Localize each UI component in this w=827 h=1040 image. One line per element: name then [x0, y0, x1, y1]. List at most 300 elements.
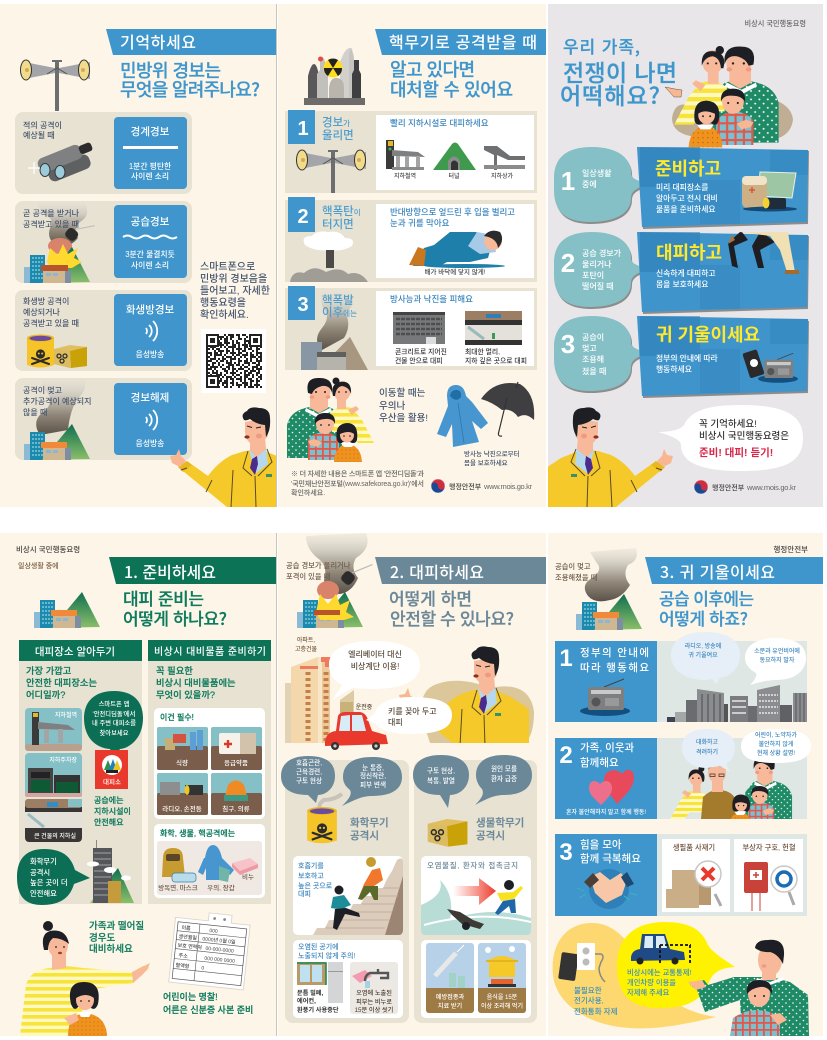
bubble: listen to radio: 귀 기울여요 [688, 651, 718, 659]
tile: vaccination [426, 943, 474, 1013]
callout: chemical attack go high: 화학무기 [30, 857, 57, 866]
callout: chemical attack go high: 높은 곳이 더 [30, 878, 68, 887]
icon: ID card: 0 [201, 965, 205, 972]
panel: 3 listen [548, 533, 823, 1036]
column: chemical attack: 화학무기 [350, 816, 389, 829]
title [390, 56, 513, 102]
section 3: after explosion: 건물 안으로 대피 [395, 356, 443, 365]
text: apartments: 아파트, [297, 636, 315, 644]
card: essentials [154, 708, 265, 819]
card: all clear: 않을 때 [23, 407, 47, 417]
tile: cooking: 이상 조리해 먹기 [481, 1002, 523, 1010]
column: chemical attack [281, 756, 409, 1023]
step 1: 준비하고 [655, 159, 721, 179]
bubble: ignore rumours: 소문과 유언비어에 [754, 647, 800, 655]
card: panic buying [662, 839, 730, 912]
callout: app: 내 주변 대피소를 [92, 718, 136, 727]
panel: nuclear attack [278, 4, 546, 507]
icon: radio [580, 679, 630, 716]
icon: red arrow [453, 878, 496, 905]
card: air raid alert: 곧 공격을 받거나 [23, 208, 80, 218]
text: family separation: 대비하세요 [89, 943, 133, 955]
bubble: symptoms 4: 환자 급증 [491, 774, 517, 783]
card: avoid contact [421, 856, 531, 935]
title: 안전할 수 있나요? [390, 605, 514, 630]
speech bubble: stairs [329, 641, 420, 700]
card: chemical alert: 화생방 공격이 [23, 296, 69, 306]
figure: running person [495, 880, 523, 915]
icon: handshake [577, 869, 637, 909]
icon: mushroom cloud [290, 232, 368, 282]
section 2: explosion: 반대방향으로 엎드린 후 입을 벌리고 [390, 207, 515, 217]
section 2: together: 2 [559, 742, 573, 769]
bubble: explain to vulnerable [741, 729, 811, 763]
icons: shelters [386, 140, 525, 170]
step 2: 신속하게 대피하고 [656, 268, 716, 278]
title: 대피 준비는 [123, 585, 204, 610]
card: all clear: 공격이 멎고 [23, 385, 62, 395]
column: know shelters: 안전해요 [94, 817, 123, 827]
illustration: family with grandfather [670, 760, 792, 819]
card: chemical alert [15, 290, 192, 371]
tile: cooking: 음식을 15분 [487, 993, 518, 1001]
section 3: overcome: 힘을 모아 [580, 838, 622, 851]
text: family separation: 가족과 떨어질 [89, 920, 144, 932]
text: raincoat caption: 몸을 보호하세요 [464, 458, 508, 467]
icon: hearts [589, 770, 634, 805]
callout: app [84, 691, 143, 757]
section 1: follow government: 정부의 안내에 [580, 647, 649, 659]
column: supplies [148, 640, 271, 904]
card: panic buying: 생필품 사재기 [673, 843, 715, 852]
text: situation [555, 562, 598, 582]
bubble: symptoms 3: 복통, 발열 [427, 776, 455, 785]
header ribbon [375, 557, 546, 584]
section 2: together [555, 729, 811, 828]
text: use raincoat or umbrella: 우산을 활용! [379, 412, 428, 424]
card: air raid alert: 공습경보 [131, 216, 170, 228]
illustration: person lying prone [409, 231, 505, 268]
callout: app: '안전디딤돌'에서 [93, 709, 136, 718]
card: stairs: 보호하고 [298, 871, 324, 880]
card: warning alert: 사이렌 소리 [131, 171, 169, 181]
card: blood donation [734, 839, 803, 912]
bubble: symptoms 2 [342, 757, 402, 806]
column: know shelters: 지하시설이 [94, 806, 131, 816]
section 3: after explosion [285, 286, 537, 370]
column: know shelters: 대피장소 알아두기 [35, 645, 115, 658]
column: know shelters: 공습에는 [94, 796, 123, 805]
step 2: 몸을 보호하세요 [656, 279, 708, 289]
card: warning alert: 1분간 평탄한 [129, 161, 171, 171]
section 2: explosion: 터지면 [322, 218, 354, 231]
section 1: follow government [555, 632, 807, 722]
title: 알고 있다면 [390, 56, 475, 82]
section 2: explosion: 핵폭탄이 [322, 204, 361, 218]
bubble: symptoms 4 [475, 755, 532, 805]
text: apartments [295, 636, 318, 653]
card: avoid contaminated air [293, 940, 403, 1018]
title: 무엇을 알려주나요? [120, 76, 260, 102]
header ribbon: 3. 귀 기울이세요 [660, 559, 775, 583]
section 2: together: 혼자 불안해하지 말고 함께 행동! [566, 808, 646, 816]
illustration: skyscraper [87, 840, 134, 903]
step 3: 멎고 [582, 343, 597, 353]
section 1: alarm: 경보가 [322, 116, 350, 129]
speech bubble: stairs: 비상계단 이용! [351, 661, 399, 671]
section 3: after explosion: 방사능과 낙진을 피해요 [390, 294, 473, 304]
column: supplies: 꼭 필요한 [156, 665, 193, 676]
icon: blue car [631, 934, 691, 964]
column: supplies: 비상시 대비물품 준비하기 [154, 645, 266, 658]
step 3: 공습이 [582, 332, 604, 342]
icon: shelter sign [95, 750, 128, 789]
section 3: overcome [555, 834, 807, 916]
character: mother and child [20, 921, 150, 1036]
icon: ID card: 주소 [178, 953, 188, 960]
step 3: 귀 기울이세요 [656, 325, 760, 345]
panel: remember sirens [0, 4, 300, 507]
card: stairs: 높은 곳으로 [298, 881, 333, 890]
header ribbon: 2. 대피하세요 [390, 559, 484, 583]
callout: traffic control: 개인차량 이용을 [627, 978, 676, 987]
text: apartments: 고층건물 [295, 645, 318, 653]
bubble: encourage [682, 729, 735, 772]
text: family separation [89, 920, 144, 955]
card: CBRN protection: 비누 [242, 872, 254, 881]
section 1: follow government: 1 [559, 645, 573, 672]
card: warning alert: 경계경보 [131, 125, 170, 138]
section 3: overcome: 함께 극복해요 [580, 852, 641, 865]
footnote: '국민재난안전포털(www.safekorea.go.kr)'에서 [291, 479, 424, 488]
figure: climbing person [358, 857, 383, 900]
panel: 1 prepare [0, 533, 277, 1036]
card: warning alert: 적의 공격이 [23, 120, 62, 130]
column: supplies: 무엇이 있을까? [156, 689, 215, 700]
text: driving label: 운전중 [356, 703, 373, 711]
callout: traffic control: 자제해 주세요 [627, 988, 670, 997]
step 3: 행동하세요 [656, 364, 692, 374]
speech bubble: leave keys: 대피 [388, 717, 403, 727]
speech bubble: remember [658, 405, 803, 471]
section 2: explosion: 2 [297, 206, 309, 228]
bubble: explain to vulnerable: 불안하지 않게 [759, 740, 793, 748]
section 3: after explosion: 3 [297, 294, 309, 316]
card: CBRN protection: 방독면, 마스크 [158, 883, 198, 892]
icon: red car [325, 712, 388, 750]
callout: electricity and phones: 전화통화 자제 [574, 1006, 618, 1016]
header ribbon: 기억하세요 [120, 29, 196, 53]
card: avoid contaminated air: 피부는 비누로 [356, 998, 392, 1006]
bubble: symptoms 2: 정신착란, [360, 771, 386, 780]
title: 우리 가족, [563, 33, 640, 58]
section 1: alarm: 울리면 [322, 129, 354, 142]
card: essentials: 이건 필수! [160, 712, 194, 722]
card: air raid alert: 3분간 물결치듯 [125, 249, 175, 259]
icon: ID card: 생년월일 [178, 933, 198, 942]
bubble: listen to radio [671, 632, 740, 684]
step 1: 중에 [582, 180, 597, 189]
footnote: ※ 더 자세한 내용은 스마트폰 앱 '안전디딤돌'과 [291, 469, 425, 478]
text: raincoat caption [464, 449, 520, 467]
header ribbon [645, 557, 823, 584]
figure: fleeing person [330, 886, 360, 930]
card: chemical alert: 음성방송 [136, 349, 164, 359]
card: chemical alert: 예상되거나 [23, 307, 60, 317]
card: CBRN protection [154, 824, 265, 898]
illustration: apartment [285, 657, 354, 743]
logo: ministry: 행정안전부 [449, 482, 482, 491]
logo: ministry: www.mois.go.kr [483, 482, 532, 491]
callout: chemical attack go high [17, 849, 90, 905]
step 1: 물품을 준비하세요 [656, 204, 716, 214]
panel: 2 evacuate [278, 533, 546, 1036]
section 1: alarm: 지하철역 [394, 172, 416, 180]
step 3: 졌을 때 [582, 366, 606, 376]
logo: ministry: www.mois.go.kr [746, 483, 796, 492]
section 3: after explosion: 콘크리트로 지어진 [395, 347, 447, 356]
column: biological attack [413, 755, 537, 1023]
tile: radio and flashlight: 라디오, 손전등 [162, 804, 202, 813]
text: name tag: 어린이는 명찰! [163, 991, 218, 1002]
thumbnail: subway: 지하철역 [55, 711, 77, 719]
card: chemical alert: 화생방경보 [126, 303, 174, 316]
bubble: symptoms 1: 근육경련, [296, 767, 322, 776]
section 1: alarm: 1 [297, 118, 309, 140]
character: officer [543, 407, 673, 507]
logo: ministry [694, 480, 796, 494]
title: 어떻게 하죠? [659, 605, 748, 630]
callout: traffic control: 비상시에는 교통통제! [627, 968, 691, 977]
column: biological attack: 공격시 [476, 830, 505, 842]
header ribbon: 핵무기로 공격받을 때 [389, 29, 537, 53]
section 3: after explosion: 이후에는 [322, 306, 357, 319]
icon: missiles [304, 48, 365, 105]
side note text: 확인하세요. [200, 308, 249, 321]
step 2: 공습 경보가 [582, 248, 622, 258]
bubble: ignore rumours [745, 638, 806, 685]
callout: chemical attack go high: 안전해요 [30, 889, 57, 898]
icon: underground shelter [465, 311, 522, 345]
title: 어떻게 하나요? [123, 605, 227, 630]
bubble: symptoms 4: 원인 모를 [491, 764, 517, 773]
text: situation: 공습이 멎고 [555, 562, 591, 571]
callout: traffic control [617, 922, 735, 1008]
card: all clear [15, 378, 192, 460]
logo: ministry: 행정안전부 [712, 483, 745, 492]
icon: radio and phone [742, 349, 798, 383]
side note text: 스마트폰으로 [200, 261, 255, 273]
bubble: symptoms 3 [413, 755, 469, 808]
footnote [291, 469, 425, 497]
speech bubble: remember: 꼭 기억하세요! [699, 418, 757, 430]
icon: ID card [169, 909, 251, 990]
text: situation: 포격이 있을 때 [286, 572, 331, 581]
step 2: 대피하고 [656, 243, 722, 263]
text: situation: 조용해졌을 때 [555, 573, 598, 582]
illustration: smoke scene [576, 548, 642, 630]
document label: 비상시 국민행동요령 [744, 19, 806, 28]
section 1: follow government: 따라 행동해요 [580, 661, 649, 674]
bubble: symptoms 2: 피부 변색 [360, 780, 386, 789]
icon: ID card: 보호 연락처 [177, 942, 203, 951]
callout: electricity and phones: 불필요한 [574, 985, 602, 995]
thumbnail: underground parking [25, 753, 82, 797]
section 2: together: 가족, 이웃과 [580, 742, 634, 754]
step 3 [554, 316, 809, 398]
title: 민방위 경보는 [120, 57, 221, 83]
card: avoid contaminated air: 오염된 공기에 [298, 942, 339, 951]
card: all clear: 음성방송 [136, 438, 164, 448]
column: know shelters: 가장 가깝고 [26, 665, 72, 676]
header ribbon [109, 557, 276, 584]
title: 전쟁이 나면 [563, 54, 677, 88]
thumbnail: underground parking: 지하주차장 [49, 756, 77, 764]
bubble: encourage: 격려하기 [696, 748, 718, 756]
section 2: explosion: 눈과 귀를 막아요 [390, 218, 450, 228]
header ribbon: 1. 준비하세요 [124, 559, 216, 583]
step 2: 포탄이 [582, 270, 604, 280]
text: name tag: 어른은 신분증 사본 준비 [163, 1004, 253, 1015]
tile: vaccination: 치료 받기 [438, 1002, 462, 1010]
step 3: 조용해 [582, 355, 604, 364]
card: avoid contaminated air: 15분 이상 씻기 [355, 1006, 393, 1014]
footnote: 확인하세요. [291, 488, 325, 497]
card: air raid alert [15, 201, 192, 283]
text: name tag [163, 991, 253, 1015]
card: avoid contaminated air: 오염에 노출된 [356, 989, 392, 997]
icon: phone and socket [558, 943, 605, 982]
thumbnail: basement: 큰 건물의 지하실 [34, 832, 76, 840]
callout: app: 찾아보세요 [100, 728, 129, 737]
icon: umbrella [481, 382, 534, 436]
section 3: after explosion: 지하 깊은 곳으로 대피 [465, 356, 527, 365]
icon: ID card: 00-000-0000 [205, 946, 234, 955]
icon: ID card: 000 [209, 928, 218, 935]
column: know shelters [17, 640, 143, 905]
bubble: explain to vulnerable: 현재 상황 설명! [757, 749, 795, 757]
title [659, 585, 754, 630]
illustration: family [665, 46, 793, 147]
card: air raid alert: 사이렌 소리 [131, 260, 169, 270]
card: chemical alert: 공격받고 있을 때 [23, 318, 79, 328]
step 2 [554, 232, 809, 314]
callout: electricity and phones [553, 923, 716, 1028]
icon: running legs [728, 232, 799, 274]
step 3: 정부의 안내에 따라 [656, 353, 718, 363]
side note text: 행동요령을 [200, 296, 246, 309]
column: know shelters: 어디일까? [26, 689, 65, 700]
section 3: after explosion: 핵폭발 [322, 293, 354, 307]
icon: raincoat [437, 385, 488, 447]
icon: backpack and map [742, 172, 797, 212]
icon: ID card: 혈액형 [175, 962, 190, 970]
card: stairs [293, 856, 403, 935]
section 1: alarm: 터널 [448, 172, 460, 180]
illustration: explosion scene [24, 201, 95, 283]
text: situation [286, 561, 351, 581]
thumbnail: subway [25, 708, 82, 751]
callout: chemical attack go high: 공격시 [30, 868, 50, 877]
ministry label: 행정안전부 [774, 544, 808, 554]
title: 공습 이후에는 [659, 585, 754, 610]
tile: bedding and clothing: 침구, 의류 [222, 804, 250, 813]
document label: 비상시 국민행동요령 [16, 544, 80, 554]
column: biological attack: 생물학무기 [476, 816, 524, 829]
icon: shelter sign: 대피소 [103, 777, 121, 786]
card: CBRN protection: 우의, 장갑 [207, 883, 235, 892]
step 2: 2 [561, 248, 575, 278]
card: stairs: 대피 [298, 889, 311, 898]
icon: binoculars [28, 139, 99, 185]
text: family separation: 경우도 [89, 932, 115, 944]
logo: ministry [431, 479, 532, 493]
card: blood donation: 부상자 구호, 헌혈 [742, 843, 796, 852]
section 3: after explosion: 최대한 멀리, [465, 347, 500, 356]
step 1 [554, 147, 809, 229]
icon: concrete building [393, 312, 445, 344]
card: avoid contact: 오염물질, 환자와 접촉금지 [427, 860, 518, 870]
step 1: 알아두고 전시 대비 [656, 193, 718, 203]
section 2: explosion: 배가 바닥에 닿지 않게! [424, 267, 486, 276]
icon: ID card: 이름 [181, 924, 191, 932]
text: use raincoat or umbrella: 이동할 때는 [379, 387, 426, 399]
header ribbon [106, 29, 276, 55]
card: avoid contaminated air: 노출되지 않게 주의! [298, 951, 355, 960]
tile: first aid: 응급약품 [224, 758, 248, 767]
card: vaccination and cooking [421, 940, 531, 1018]
icon: ID card: 000 000 0000 [204, 956, 235, 965]
card: avoid contaminated air: 에어컨, [297, 997, 316, 1005]
icon: ID card: 0000년 0월 0일 [202, 935, 236, 946]
section 3: overcome: 3 [559, 839, 573, 866]
speech bubble: remember: 준비! 대피! 듣기! [699, 446, 773, 459]
figure: fallen person [447, 909, 484, 930]
callout: app: 스마트폰 앱 [99, 699, 130, 708]
illustration: bomb explosion [297, 533, 372, 628]
side note text: 들어보고, 자세한 [200, 285, 270, 297]
illustration: grey city [667, 685, 807, 722]
text: use raincoat or umbrella: 우의나 [379, 400, 405, 412]
step 3: 3 [561, 329, 575, 359]
card: air raid alert: 공격받고 있을 때 [23, 219, 79, 229]
speech bubble: remember: 비상시 국민행동요령은 [699, 430, 789, 442]
step 1: 미리 대피장소를 [656, 182, 708, 192]
speech bubble: leave keys: 키를 꽂아 두고 [388, 706, 437, 716]
bubble: symptoms 2: 눈 통증, [362, 764, 384, 772]
document label: 일상생활 중에 [18, 561, 59, 570]
speech bubble: leave keys [366, 697, 452, 734]
bubble: symptoms 3: 구토 현상, [427, 766, 455, 775]
bubble: symptoms 1: 호흡곤란, [296, 758, 322, 767]
text: situation: 공습 경보가 울리거나 [286, 561, 351, 570]
card: stairs: 호흡기를 [298, 861, 324, 870]
QR code [201, 329, 266, 393]
title: 대처할 수 있어요 [390, 76, 513, 102]
step 1: 일상생활 [582, 168, 612, 178]
step 2: 떨어질 때 [582, 281, 614, 291]
bubble: symptoms 1: 구토 현상 [296, 776, 322, 785]
bubble: explain to vulnerable: 어린이, 노약자가 [755, 731, 797, 739]
title [560, 33, 677, 111]
column: chemical attack: 공격시 [350, 830, 379, 842]
tile: food: 식량 [176, 758, 188, 767]
card: CBRN protection: 화학, 생물, 핵공격에는 [160, 828, 235, 838]
illustration: city scene [34, 592, 100, 628]
card: avoid contaminated air: 환풍기 사용중단 [297, 1006, 339, 1014]
title: 어떻게 하면 [389, 585, 472, 610]
card: all clear: 경보해제 [131, 391, 169, 404]
